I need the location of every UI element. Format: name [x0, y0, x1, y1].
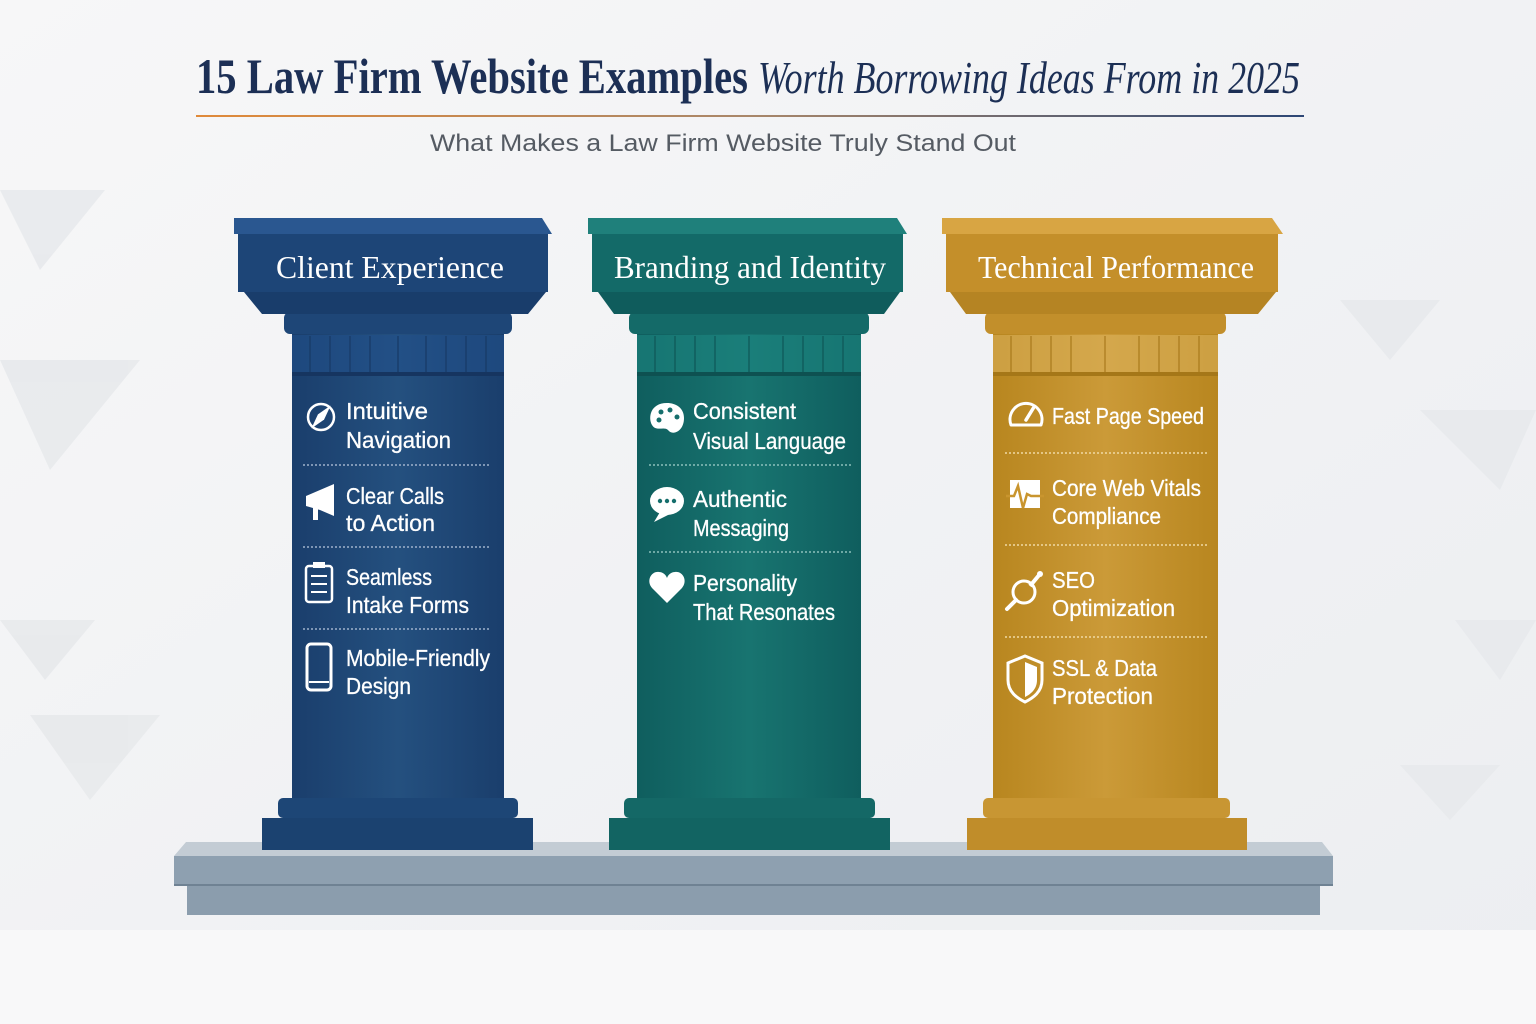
item: Personality That Resonates — [649, 570, 835, 625]
item: Clear Calls to Action: to Action — [346, 510, 435, 536]
heading: Technical Performance: Technical Performance — [978, 249, 1254, 285]
item: Core Web Vitals Compliance — [1006, 475, 1201, 529]
item: Fast Page Speed: Fast Page Speed — [1052, 403, 1204, 429]
pillar: Branding and Identity — [588, 218, 907, 850]
item: Mobile-Friendly Design — [307, 644, 490, 699]
item: Personality That Resonates: That Resonates — [693, 599, 835, 625]
pillar: Client Experience — [234, 218, 552, 850]
item: SEO Optimization — [1007, 567, 1175, 621]
item: Authentic Messaging — [650, 486, 789, 541]
item: Authentic Messaging: Messaging — [693, 515, 789, 541]
item: Core Web Vitals Compliance: Compliance — [1052, 503, 1161, 529]
item: SEO Optimization: Optimization — [1052, 595, 1175, 621]
subtitle: What Makes a Law Firm Website Truly Stand Out — [430, 130, 1016, 157]
item: Mobile-Friendly Design: Design — [346, 673, 411, 699]
item: Authentic Messaging: Authentic — [693, 486, 787, 512]
pillar: Technical Performance — [942, 218, 1283, 850]
item: Seamless Intake Forms: Intake Forms — [346, 592, 469, 618]
heading: Branding and Identity: Branding and Identity — [614, 249, 886, 285]
heading: Client Experience: Client Experience — [276, 249, 504, 285]
item: Fast Page Speed — [1010, 403, 1204, 429]
item: Personality That Resonates: Personality — [693, 570, 797, 596]
title: 15 Law Firm Website Examples — [196, 48, 748, 104]
item: Core Web Vitals Compliance: Core Web Vitals — [1052, 475, 1201, 501]
title: Worth Borrowing Ideas From in 2025 — [758, 52, 1300, 103]
item: SSL & Data Protection: Protection — [1052, 683, 1153, 709]
item: Seamless Intake Forms: Seamless — [346, 564, 432, 590]
title — [196, 48, 1300, 104]
item: Intuitive Navigation: Intuitive — [346, 398, 428, 424]
item: SSL & Data Protection — [1008, 655, 1157, 709]
item: Mobile-Friendly Design: Mobile-Friendly — [346, 645, 490, 671]
platform — [174, 842, 1333, 915]
item: SEO Optimization: SEO — [1052, 567, 1095, 593]
item: SSL & Data Protection: SSL & Data — [1052, 655, 1157, 681]
item: Consistent Visual Language: Visual Language — [693, 428, 846, 454]
item: Seamless Intake Forms — [306, 562, 469, 618]
item: Intuitive Navigation — [308, 398, 451, 453]
item: Clear Calls to Action — [306, 483, 444, 536]
item: Intuitive Navigation: Navigation — [346, 427, 451, 453]
item: Consistent Visual Language: Consistent — [693, 398, 797, 424]
item: Consistent Visual Language — [650, 398, 846, 454]
item: Clear Calls to Action: Clear Calls — [346, 483, 444, 509]
